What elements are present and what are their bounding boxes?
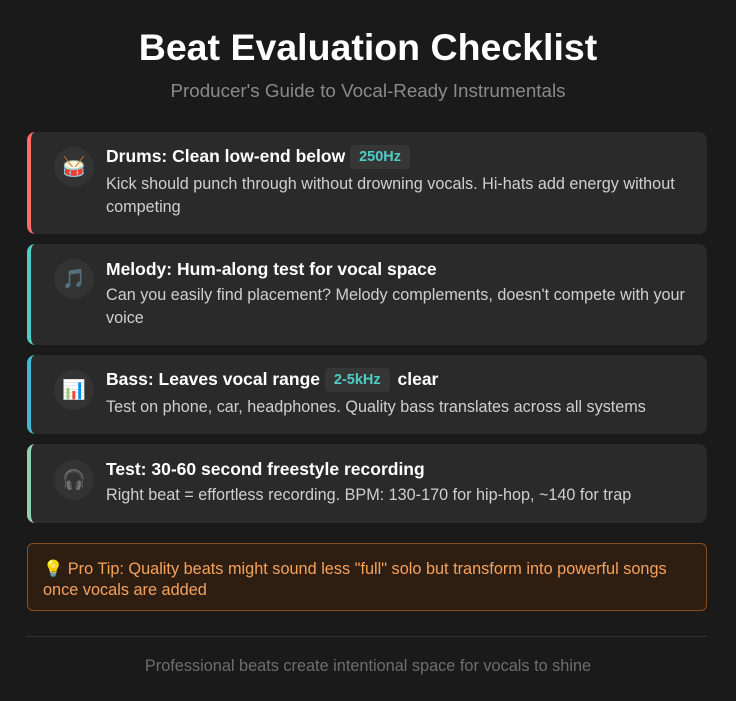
icon: chart: 📊 — [62, 380, 86, 401]
text: test: Right beat = effortless recording. BPM: 130-170 for hip-hop, ~140 for trap — [106, 486, 631, 504]
icon: music note: 🎵 — [62, 269, 86, 290]
icon: drum: 🥁 — [62, 157, 86, 178]
icon: drum — [54, 147, 94, 187]
text: drums: Kick should punch through without drowning vocals. Hi-hats add energy without competing — [106, 175, 675, 216]
heading: drums: 250Hz — [359, 149, 401, 165]
card: test — [27, 444, 707, 523]
text: melody: Can you easily find placement? Melody complements, doesn't compete with your voice — [106, 286, 685, 327]
card: bass — [27, 355, 707, 434]
heading: melody: Melody: Hum-along test for vocal space — [106, 259, 437, 279]
heading: drums — [106, 145, 410, 169]
icon: chart — [54, 370, 94, 410]
callout: pro tip — [27, 543, 707, 611]
heading: bass: 2-5kHz — [334, 372, 381, 388]
icon: headphones — [54, 460, 94, 500]
card: melody — [27, 244, 707, 345]
callout: pro tip: 💡 Pro Tip: Quality beats might sound less "full" solo but transform into powerful songs once vocals are added — [43, 560, 667, 599]
icon: music note — [54, 259, 94, 299]
footer: Professional beats create intentional space for vocals to shine — [145, 657, 591, 675]
heading: test: Test: 30-60 second freestyle recording — [106, 459, 425, 479]
card: drums — [27, 132, 707, 234]
subtitle: Producer's Guide to Vocal-Ready Instrumentals — [170, 80, 566, 101]
heading: bass: Bass: Leaves vocal range clear — [106, 369, 438, 389]
icon: headphones: 🎧 — [62, 470, 86, 491]
text: bass: Test on phone, car, headphones. Quality bass translates across all systems — [106, 398, 646, 416]
title: Beat Evaluation Checklist — [139, 26, 597, 68]
heading: drums: Drums: Clean low-end below — [106, 146, 345, 166]
